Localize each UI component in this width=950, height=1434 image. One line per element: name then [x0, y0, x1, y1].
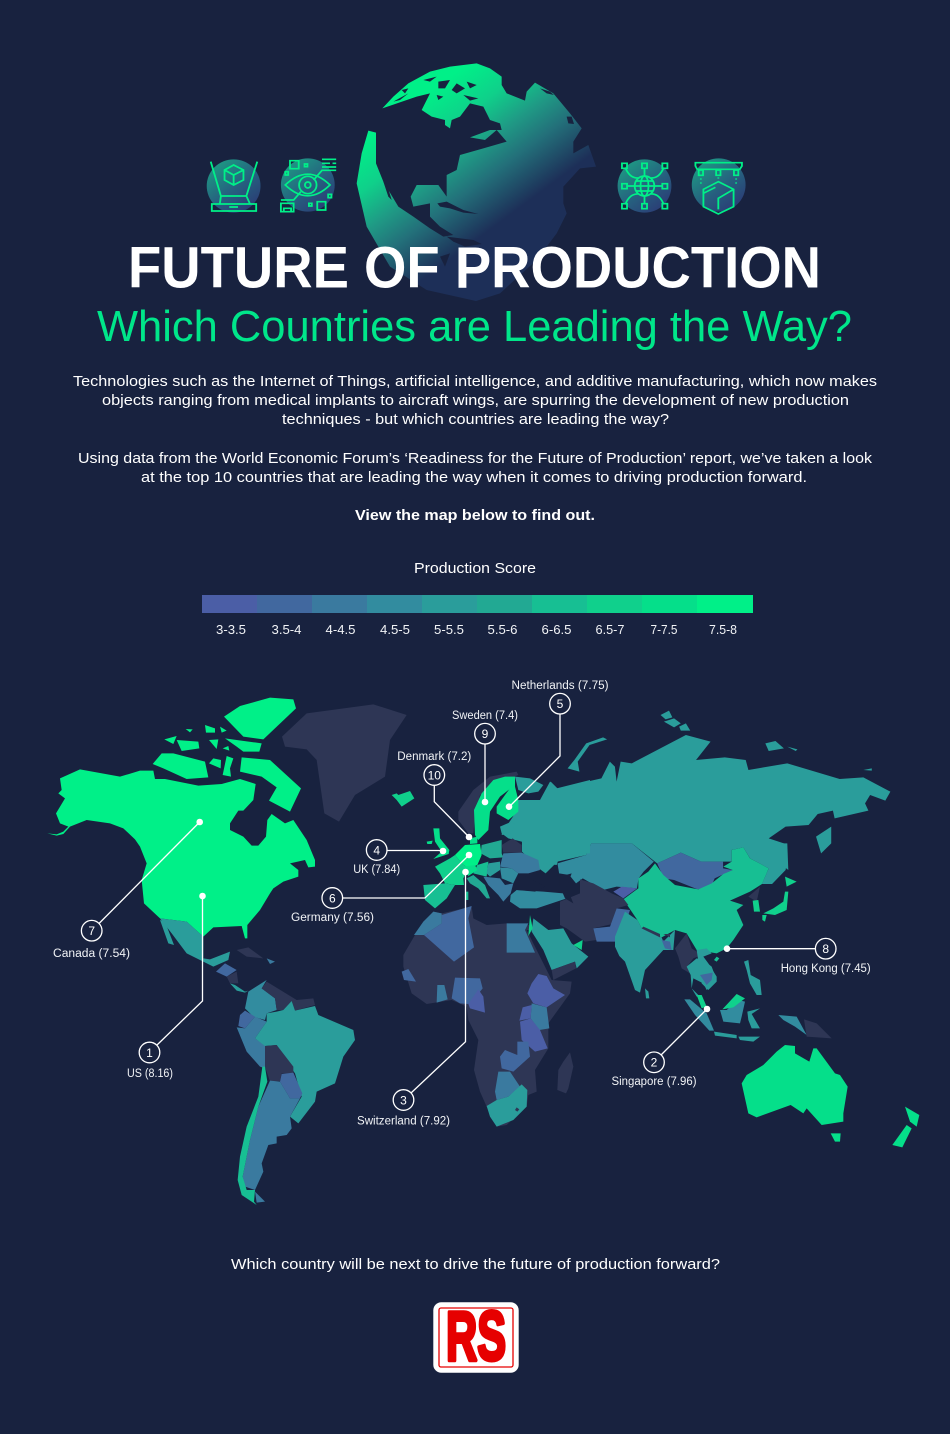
icon: 3D printing: [692, 158, 746, 214]
callout: 8 Hong Kong: [724, 938, 871, 975]
legend labels: 5.5-6: [488, 623, 518, 637]
callout: 10 Denmark: Denmark (7.2): [397, 751, 471, 763]
intro text block: objects ranging from medical implants to aircraft wings, are spurring the development of new production: [102, 392, 849, 409]
intro text block: Technologies such as the Internet of Things, artificial intelligence, and additive manufacturing, which now makes: [73, 373, 877, 390]
callout: 3 Switzerland: [357, 869, 469, 1128]
callout: 6 Germany: [291, 852, 472, 924]
callout: 9 Sweden: [452, 710, 518, 805]
callout: 10 Denmark: [397, 751, 472, 840]
legend labels: [216, 623, 737, 637]
closing question: Which country will be next to drive the future of production forward?: [231, 1256, 720, 1273]
map: Arabian Peninsula: [528, 915, 588, 980]
RS logo: RS: [446, 1297, 506, 1375]
callout: 4 UK: 4: [373, 844, 380, 858]
map: North America and Greenland: [47, 698, 407, 967]
legend title: Production Score: [414, 560, 536, 577]
map: Africa: [402, 906, 573, 1127]
callout: 1 US: 1: [146, 1046, 153, 1060]
callout: 10 Denmark: 10: [428, 768, 441, 782]
callout: 3 Switzerland: Switzerland (7.92): [357, 1116, 450, 1128]
callout: 7 Canada: Canada (7.54): [53, 948, 130, 960]
intro text block: at the top 10 countries that are leading the way when it comes to driving production forward.: [141, 469, 807, 486]
callout: 9 Sweden: 9: [482, 727, 489, 741]
legend labels: 3-3.5: [216, 623, 246, 637]
map: Asia: [560, 847, 797, 1042]
callout: 5 Netherlands: Netherlands (7.75): [512, 680, 609, 692]
legend: production score: [202, 560, 753, 637]
callout: 1 US: US (8.16): [127, 1068, 173, 1080]
legend labels: 6.5-7: [596, 623, 625, 637]
legend labels: 4-4.5: [326, 623, 356, 637]
title: FUTURE OF PRODUCTION: [128, 236, 821, 300]
intro text block: techniques - but which countries are leading the way?: [282, 411, 669, 428]
callout: 6 Germany: Germany (7.56): [291, 912, 374, 924]
callout: 4 UK: UK (7.84): [353, 864, 400, 876]
icon: connected globe: [618, 159, 671, 213]
globe illustration: [357, 63, 596, 301]
legend labels: 7.5-8: [709, 623, 737, 637]
callout: 5 Netherlands: 5: [557, 697, 564, 711]
legend labels: 4.5-5: [380, 623, 410, 637]
callout: 2 Singapore: [612, 1006, 710, 1088]
callout: 9 Sweden: Sweden (7.4): [452, 710, 518, 722]
legend labels: 6-6.5: [542, 623, 572, 637]
map: Europe, Middle East and North Africa: [392, 772, 590, 908]
callout: 7 Canada: [53, 819, 203, 960]
callout: 3 Switzerland: 3: [400, 1094, 407, 1108]
map: Russia, Central Asia and Arctic islands: [505, 711, 890, 890]
callout: 8 Hong Kong: Hong Kong (7.45): [781, 963, 871, 975]
subtitle: Which Countries are Leading the Way?: [97, 302, 852, 351]
callout: 7 Canada: 7: [88, 924, 95, 938]
callout: 2 Singapore: 2: [651, 1056, 658, 1070]
map: Central and South America: [216, 947, 355, 1205]
legend labels: 5-5.5: [434, 623, 464, 637]
callout: 5 Netherlands: [506, 680, 609, 810]
callout: 8 Hong Kong: 8: [822, 942, 829, 956]
callout: 6 Germany: 6: [329, 892, 336, 906]
world map: [47, 698, 919, 1205]
map: Oceania: [742, 1015, 919, 1147]
icon: hologram cube: [207, 159, 261, 213]
callout: 1 US: [127, 893, 206, 1080]
intro text block: Using data from the World Economic Forum’s ‘Readiness for the Future of Production’ report, we’ve taken a look: [78, 450, 873, 467]
RS logo: [433, 1297, 519, 1375]
icon: augmented eye: [281, 158, 336, 212]
call to action text: View the map below to find out.: [355, 507, 595, 524]
legend labels: 7-7.5: [650, 623, 678, 637]
legend labels: 3.5-4: [272, 623, 302, 637]
callout: 2 Singapore: Singapore (7.96): [612, 1076, 697, 1088]
callout: 4 UK: [353, 840, 446, 876]
intro text block: [73, 373, 877, 486]
legend colour bar: [202, 595, 753, 613]
